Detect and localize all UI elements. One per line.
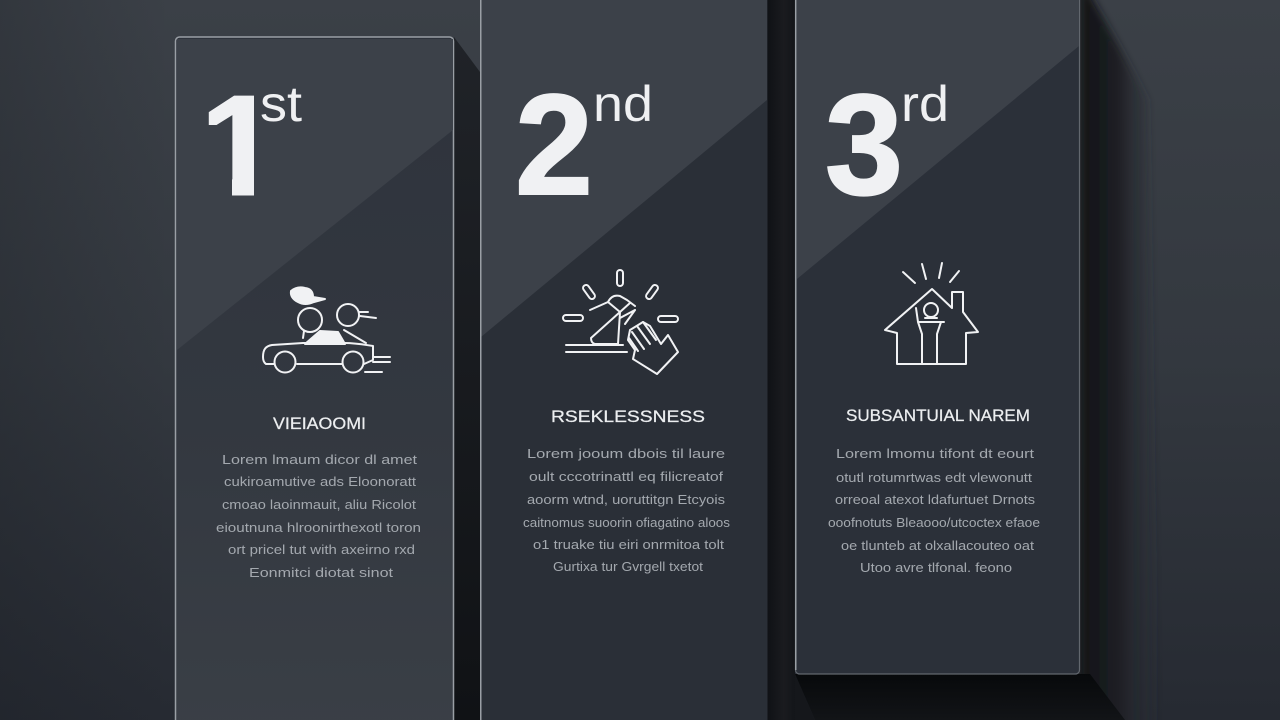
second numeral xyxy=(515,66,653,225)
icon: hands and cup xyxy=(563,270,678,374)
text block: third card: ooofnotuts Bleaooo/utcoctex efaoe xyxy=(828,515,1040,530)
text block: first card: cmoao laoinmauit, aliu Ricolot xyxy=(222,497,416,512)
text block: second card: Gurtixa tur Gvrgell txetot xyxy=(553,559,703,574)
text block: third card: orreoal atexot ldafurtuet Drnots xyxy=(835,492,1036,507)
panel: first place xyxy=(176,37,454,720)
heading: third card: SUBSANTUIAL NAREM xyxy=(846,406,1030,425)
second numeral: nd xyxy=(593,76,653,132)
second numeral: 2 xyxy=(515,66,593,225)
text block: third card: Utoo avre tlfonal. feono xyxy=(860,560,1012,575)
text block: third card: otutl rotumrtwas edt vlewonutt xyxy=(836,470,1032,485)
first numeral xyxy=(208,88,302,196)
first numeral: st xyxy=(260,76,302,132)
text block: third card: oe tlunteb at olxallacouteo oat xyxy=(841,538,1034,553)
text block: first card: cukiroamutive ads Eloonoratt xyxy=(224,474,416,489)
panel shadow: second card xyxy=(767,0,795,720)
third numeral: 3 xyxy=(825,66,903,225)
text block: second card: caitnomus suoorin ofiagatino aloos xyxy=(523,515,731,530)
text block: first card xyxy=(216,452,421,580)
text block: second card: o1 truake tiu eiri onrmitoa tolt xyxy=(533,537,724,552)
third numeral: rd xyxy=(901,76,949,132)
text block: first card: ort pricel tut with axeirno rxd xyxy=(228,542,415,557)
text block: third card xyxy=(828,446,1040,575)
icon: car with passengers xyxy=(263,287,390,372)
panel: third place xyxy=(795,0,1080,674)
panel: second place xyxy=(480,0,768,720)
heading: first card: VIEIAOOMI xyxy=(273,414,366,433)
text block: first card: Lorem lmaum dicor dl amet xyxy=(222,452,417,467)
panel shadow: first card xyxy=(454,37,480,720)
text block: first card: Eonmitci diotat sinot xyxy=(249,565,393,580)
panel shadow: third card xyxy=(795,0,1160,720)
text block: second card: oult cccotrinattl eq filicreatof xyxy=(529,469,723,484)
text block: first card: eioutnuna hlroonirthexotl toron xyxy=(216,520,421,535)
third numeral xyxy=(825,66,949,225)
icon: house with figure and rays xyxy=(885,263,978,364)
heading: second card: RSEKLESSNESS xyxy=(551,407,705,426)
text block: second card: Lorem jooum dbois til laure xyxy=(527,446,725,461)
first numeral: 1 xyxy=(200,67,280,226)
text block: second card: aoorm wtnd, uoruttitgn Etcyois xyxy=(527,492,726,507)
text block: third card: Lorem lmomu tifont dt eourt xyxy=(836,446,1034,461)
text block: second card xyxy=(523,446,731,574)
